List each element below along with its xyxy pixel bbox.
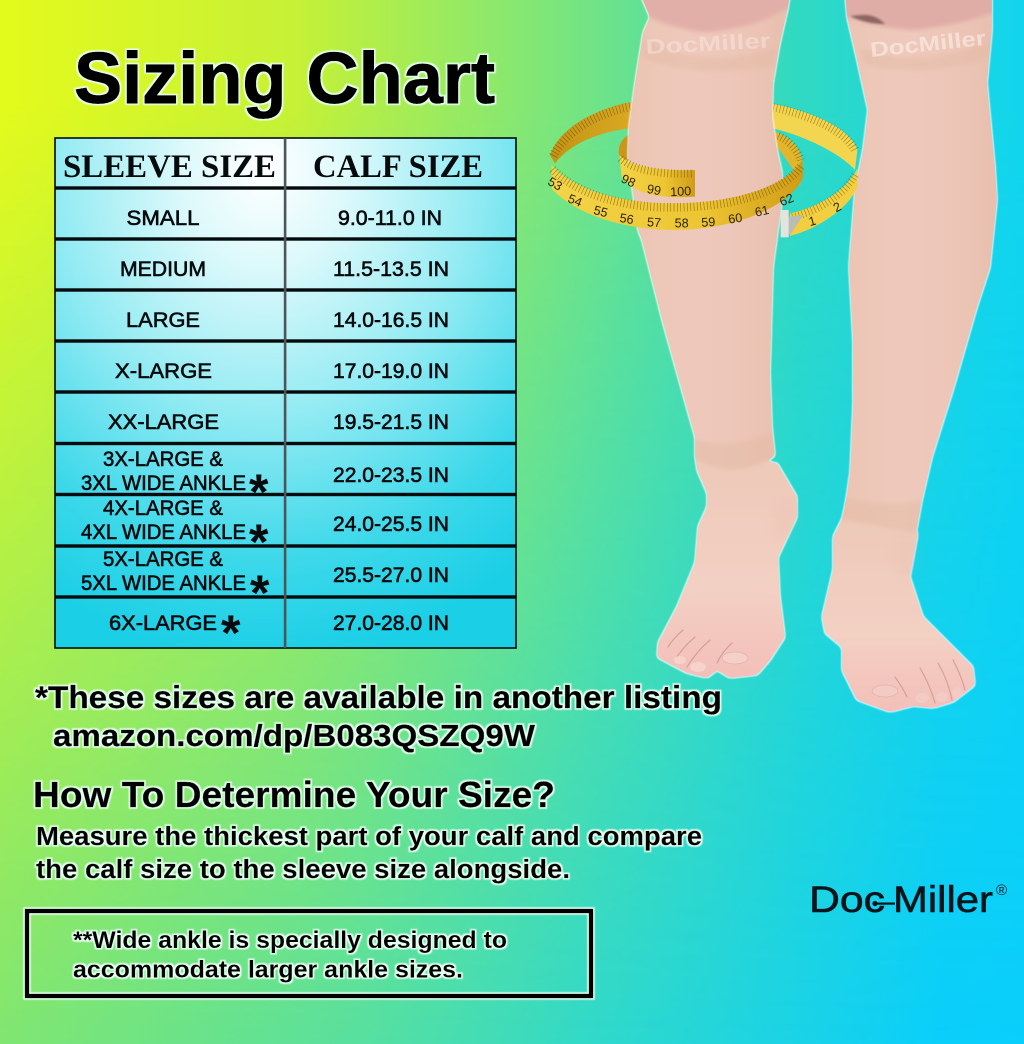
tape numbers: 61 — [754, 203, 770, 220]
title: Sizing Chart — [74, 39, 495, 119]
callout text: **Wide ankle is specially designed to — [73, 927, 507, 954]
header row — [63, 149, 483, 185]
row: medium: 11.5-13.5 IN — [333, 258, 449, 281]
sleeve cuffs — [641, 38, 990, 533]
wide ankle callout — [27, 911, 591, 996]
how to instructions — [36, 823, 702, 884]
row: medium: MEDIUM — [120, 258, 206, 281]
tape start — [790, 168, 857, 236]
header row: SLEEVE SIZE — [63, 149, 276, 185]
tape numbers — [545, 172, 844, 231]
row: large: 14.0-16.5 IN — [333, 309, 449, 332]
tape numbers: 2 — [831, 199, 844, 215]
tape numbers: 59 — [701, 215, 716, 230]
row: 5x-large — [81, 548, 449, 621]
right compression sleeve — [842, 13, 997, 533]
tape numbers: 60 — [727, 211, 743, 227]
how to heading: How To Determine Your Size? — [33, 774, 555, 815]
leg silhouettes — [628, 0, 997, 712]
row: 6x-large: * — [221, 605, 241, 661]
row: 5x-large: 5XL WIDE ANKLE — [81, 572, 246, 595]
row: 5x-large: 5X-LARGE & — [103, 548, 223, 571]
row: 3x-large: * — [249, 464, 269, 520]
tape end — [619, 155, 695, 197]
row: 6x-large: 6X-LARGE — [109, 612, 217, 635]
row: xx-large: 19.5-21.5 IN — [333, 411, 449, 434]
row: medium — [120, 258, 449, 281]
left knee — [640, 0, 790, 32]
brand logo — [809, 879, 1007, 920]
knee crease — [850, 15, 885, 24]
tape numbers: 100 — [670, 184, 692, 199]
tape numbers: 53 — [545, 174, 565, 194]
tape numbers: 98 — [619, 172, 638, 190]
other listing note: *These sizes are available in another listing — [35, 679, 722, 715]
row: small — [126, 207, 442, 230]
row: large — [126, 309, 449, 332]
header row: CALF SIZE — [313, 149, 483, 185]
row: 4x-large: * — [249, 514, 269, 570]
sizing table — [55, 138, 516, 661]
illustration: legs and measuring tape — [545, 0, 997, 712]
table background — [55, 138, 516, 648]
row: small: SMALL — [126, 207, 200, 230]
row: 3x-large: 22.0-23.5 IN — [333, 464, 449, 487]
other listing note — [35, 679, 722, 753]
tape: back of loop — [550, 102, 857, 187]
metal tab — [788, 215, 803, 235]
row: x-large: 17.0-19.0 IN — [333, 360, 449, 383]
row: 5x-large: 25.5-27.0 IN — [333, 564, 449, 587]
callout text: accommodate larger ankle sizes. — [73, 956, 463, 984]
right knee — [845, 0, 992, 30]
toes — [668, 630, 965, 703]
tape numbers: 54 — [566, 192, 584, 210]
tape band — [552, 160, 803, 230]
left compression sleeve — [628, 8, 788, 470]
callout frame — [27, 911, 591, 996]
row: 3x-large: 3XL WIDE ANKLE — [81, 472, 246, 495]
sleeve brand: right: DocMiller — [869, 27, 987, 62]
callout text — [73, 927, 507, 984]
row: xx-large: XX-LARGE — [108, 411, 219, 434]
tape numbers: 1 — [807, 214, 818, 229]
tape numbers: 57 — [646, 215, 662, 230]
brand logo: Doc — [809, 879, 885, 920]
how to instructions: the calf size to the sleeve size alongside. — [36, 856, 570, 884]
row: 3x-large — [81, 448, 449, 520]
row: x-large — [115, 360, 449, 383]
row: 3x-large: 3X-LARGE & — [103, 448, 223, 471]
left leg foot — [657, 455, 797, 678]
sleeve brand: left: DocMiller — [645, 29, 771, 59]
row: large: LARGE — [126, 309, 200, 332]
right leg foot — [822, 519, 975, 712]
tape numbers: 62 — [778, 191, 796, 209]
brand logo: Miller — [893, 879, 993, 920]
foot shading — [778, 500, 912, 575]
row: 4x-large — [81, 497, 449, 570]
row: xx-large — [108, 411, 449, 434]
row: x-large: X-LARGE — [115, 360, 212, 383]
row: 6x-large: 27.0-28.0 IN — [333, 612, 449, 635]
tape numbers: 58 — [675, 217, 689, 231]
tape numbers: 55 — [592, 203, 609, 220]
row: 4x-large: 4X-LARGE & — [103, 497, 223, 520]
brand logo: ® — [996, 882, 1007, 899]
tape: front of loop — [545, 155, 857, 237]
tape numbers: 56 — [619, 211, 635, 227]
row: 4x-large: 24.0-25.5 IN — [333, 513, 449, 536]
row: small: 9.0-11.0 IN — [338, 207, 442, 230]
how to instructions: Measure the thickest part of your calf and compare — [36, 823, 702, 851]
tape numbers: 99 — [646, 182, 662, 198]
table rules — [55, 138, 516, 648]
row: 4x-large: 4XL WIDE ANKLE — [81, 521, 246, 544]
row: 6x-large — [109, 605, 449, 661]
other listing note: amazon.com/dp/B083QSZQ9W — [53, 718, 536, 753]
row: 5x-large: * — [250, 565, 270, 621]
